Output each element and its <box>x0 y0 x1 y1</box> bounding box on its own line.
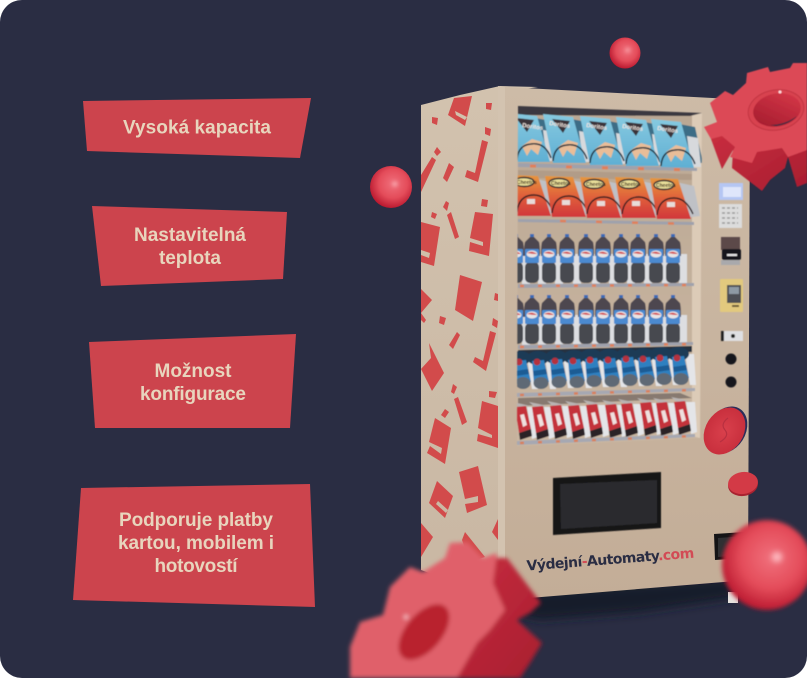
label: Podporuje platby <box>73 484 315 607</box>
side pattern of red shapes <box>421 96 498 562</box>
gear: top right <box>704 63 807 191</box>
row: chocolate bars <box>512 393 697 440</box>
label: Podporuje platby: hotovostí <box>154 556 238 577</box>
bottom gear side <box>440 558 542 678</box>
label: Podporuje platby: kartou, mobilem i <box>118 533 274 554</box>
coin small <box>728 472 758 496</box>
row: Cheetos bags: Cheetos <box>656 183 676 189</box>
bottom gear hole <box>389 595 459 669</box>
gear: bottom <box>350 542 542 678</box>
label: Možnost konfigurace <box>89 334 296 428</box>
vending machine <box>421 86 750 603</box>
machine foot <box>728 592 738 603</box>
sphere: bottom right <box>722 520 807 610</box>
gear rim <box>748 89 804 131</box>
row: Doritos bags: Doritos <box>522 123 544 132</box>
machine side panel <box>421 86 538 600</box>
machine floor shadow <box>522 582 731 624</box>
coin large <box>704 406 748 454</box>
row: Cheetos bags: Cheetos <box>517 180 537 186</box>
label: Možnost konfigurace: konfigurace <box>140 384 246 405</box>
row: Cheetos bags: Cheetos <box>551 181 571 187</box>
label: Podporuje platby: Podporuje platby <box>119 510 273 531</box>
gear face <box>704 63 807 163</box>
return slot <box>714 532 741 560</box>
label: Nastavitelná teplota: teplota <box>159 248 221 269</box>
row: Pepsi bottles lower <box>508 295 687 345</box>
round buttons <box>726 354 736 388</box>
label: Nastavitelná teplota: Nastavitelná <box>134 225 246 246</box>
bill slot <box>721 331 743 341</box>
keypad <box>719 204 742 228</box>
pickup flap <box>553 472 661 535</box>
row: Cheetos bags: Cheetos <box>621 182 641 188</box>
row: Pepsi bottles <box>508 234 687 284</box>
screen <box>719 183 743 200</box>
product cabinet <box>507 106 703 446</box>
bottom gear face <box>350 542 505 678</box>
label: Vysoká kapacita <box>83 98 311 158</box>
row: Doritos bags: Doritos <box>586 123 608 132</box>
row: Doritos bags <box>507 113 703 168</box>
row: Cheetos bags <box>510 175 700 219</box>
payment terminal <box>720 279 743 312</box>
row: cans <box>509 346 696 389</box>
row: Doritos bags: Doritos <box>622 124 644 133</box>
label: Nastavitelná teplota <box>92 206 287 286</box>
row: Doritos bags: Doritos <box>549 121 571 130</box>
label: Vysoká kapacita: Vysoká kapacita <box>123 118 271 138</box>
card reader <box>721 237 741 265</box>
gear hole <box>753 94 800 127</box>
row: Cheetos bags: Cheetos <box>586 182 606 188</box>
row: Doritos bags: Doritos <box>657 126 679 135</box>
machine front panel <box>505 87 750 600</box>
label: Možnost konfigurace: Možnost <box>154 361 232 382</box>
sphere: top <box>610 38 640 68</box>
shelves <box>517 163 697 445</box>
gear extruded side <box>711 130 807 191</box>
sphere: left <box>370 166 412 208</box>
logo text: Výdejní-Automaty.com <box>526 546 695 574</box>
control panel <box>719 183 743 388</box>
